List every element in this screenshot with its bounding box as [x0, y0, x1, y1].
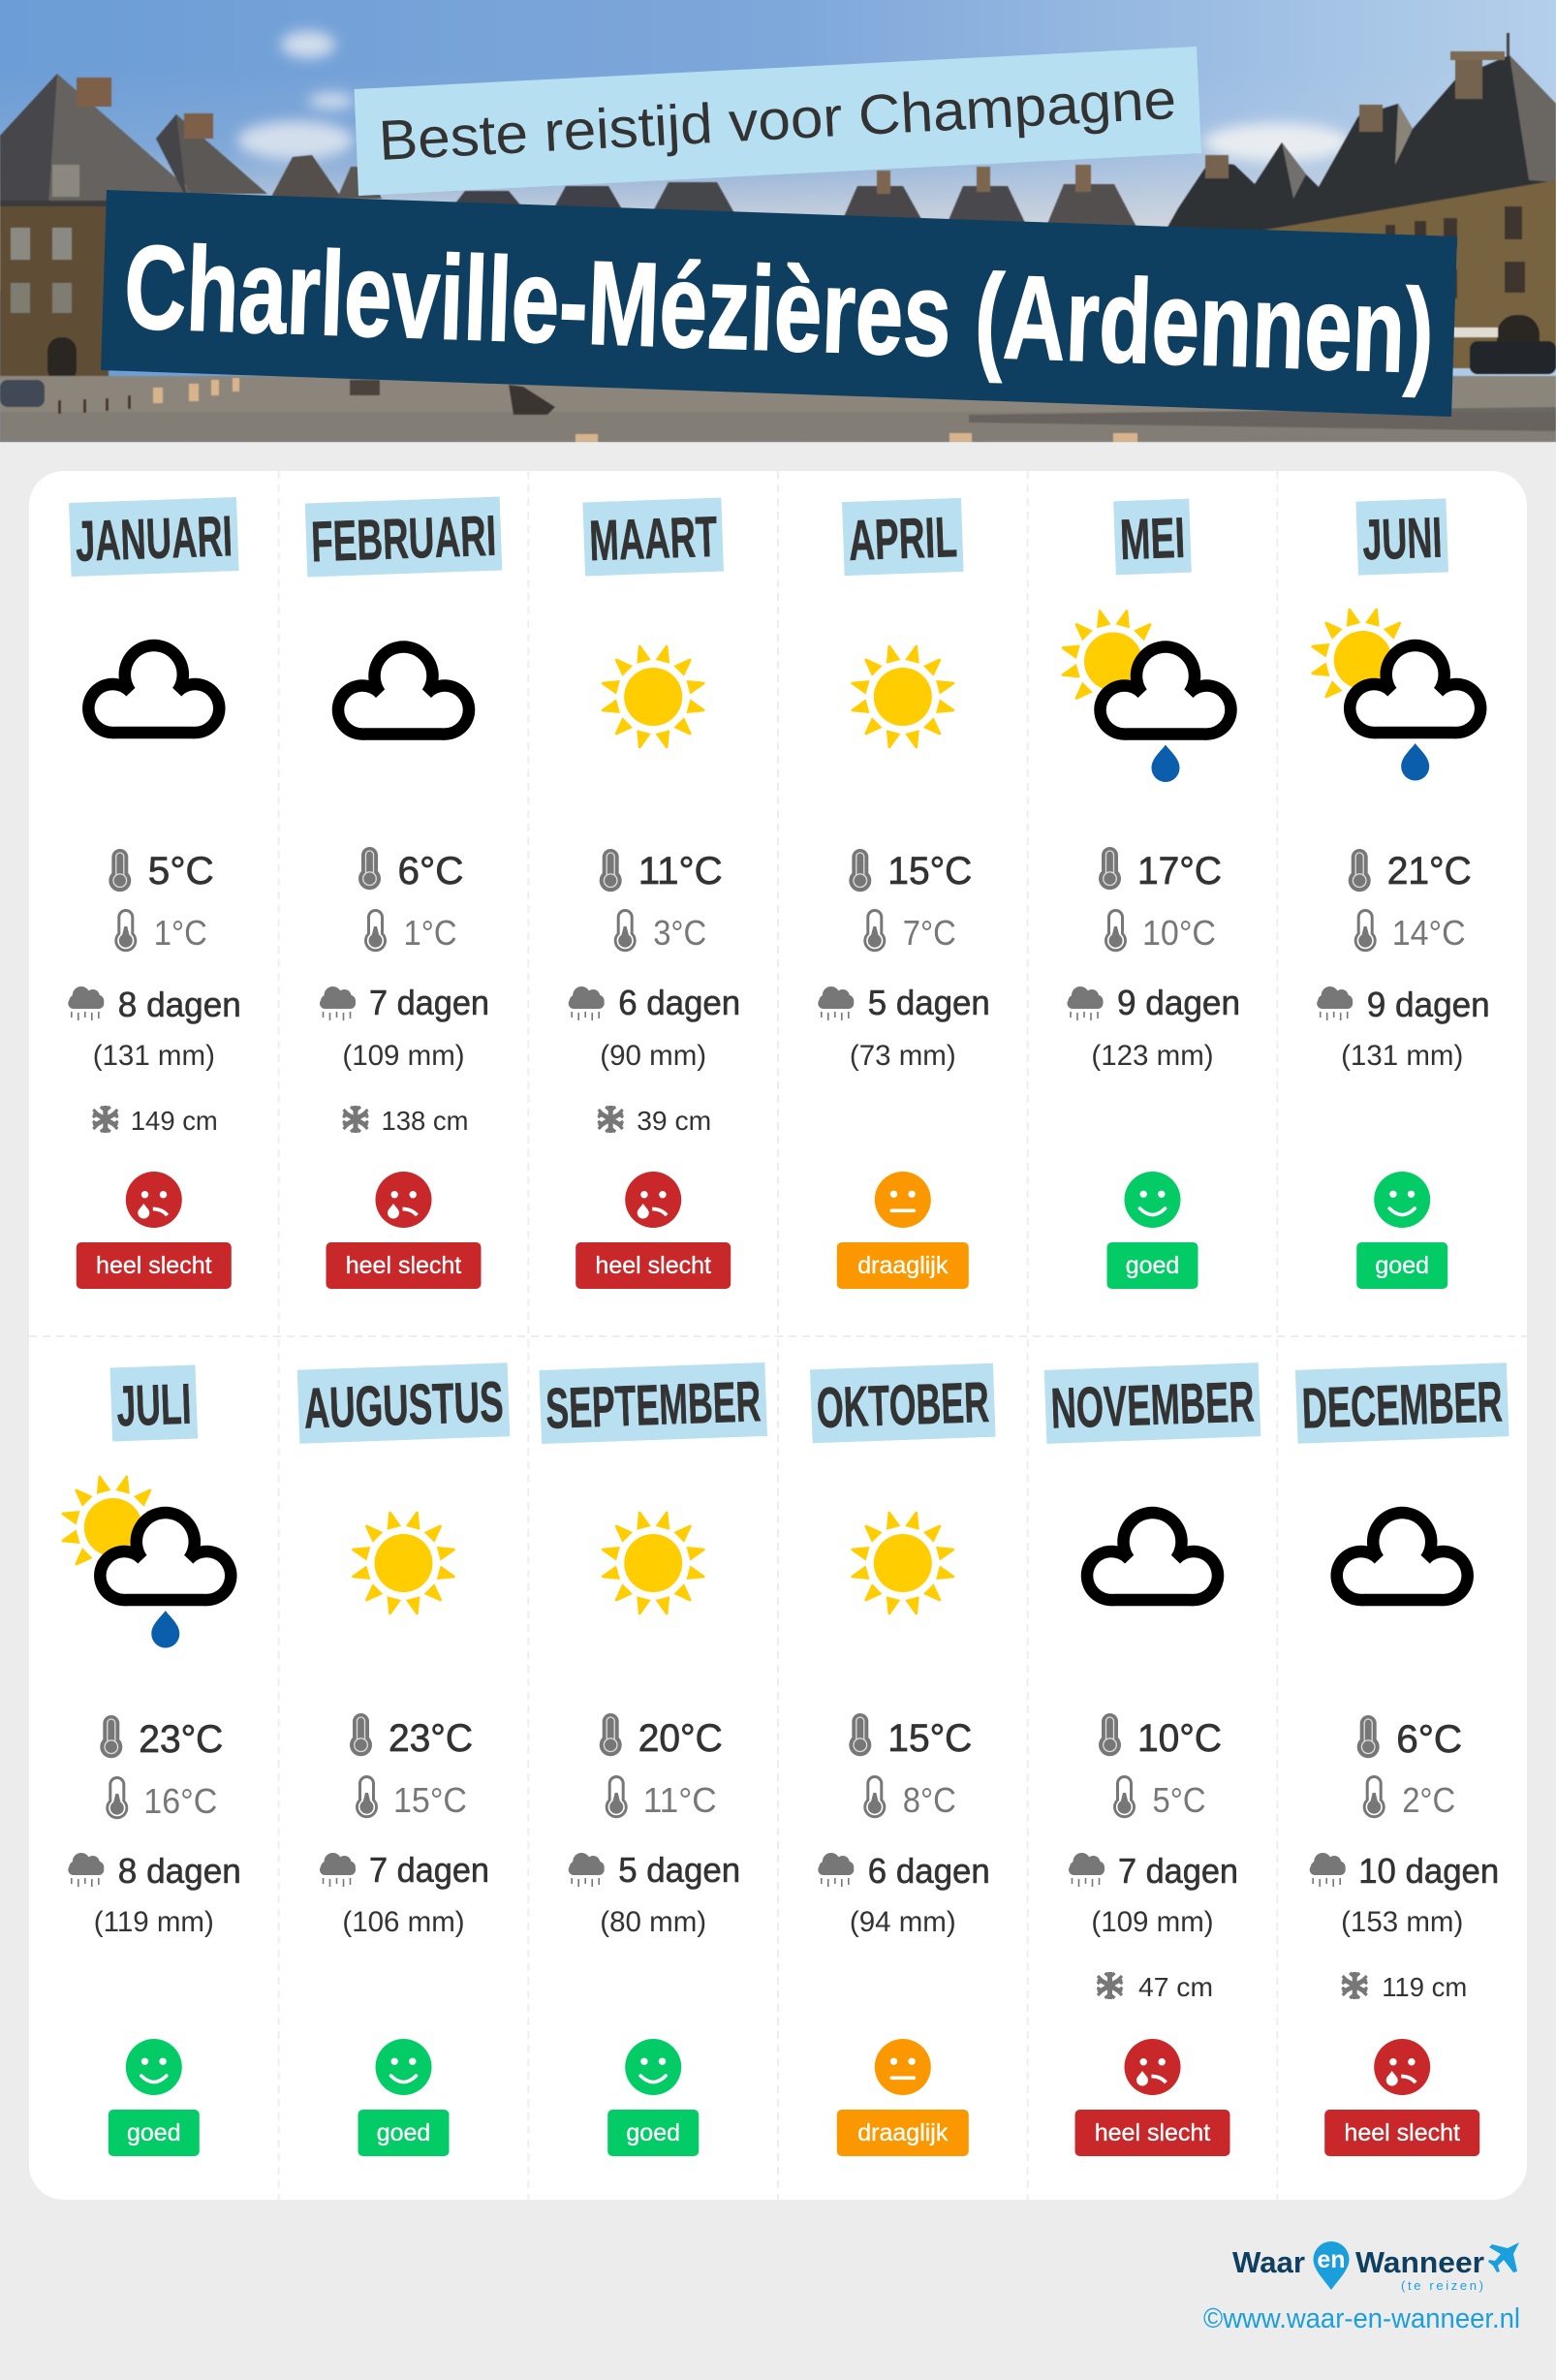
rainfall: (106 mm): [342, 1906, 465, 1938]
icon: airplane: [1488, 2242, 1519, 2272]
month label: APRIL: [848, 505, 958, 573]
snowfall: [93, 1106, 218, 1136]
rating badge: [1075, 2110, 1230, 2156]
snowfall: 138 cm: [382, 1106, 469, 1136]
high temperature: 15°C: [887, 1717, 972, 1760]
low temperature: [114, 909, 207, 953]
high temperature: 6°C: [397, 850, 463, 892]
rainfall: (153 mm): [1341, 1906, 1463, 1938]
low temperature: 2°C: [1402, 1780, 1455, 1820]
high temperature: [849, 1713, 972, 1760]
rainfall: (131 mm): [93, 1040, 215, 1072]
rating badge: [837, 1242, 969, 1289]
rainfall: (109 mm): [1091, 1906, 1214, 1938]
month: september: [539, 1362, 767, 2156]
high temperature: [350, 1713, 473, 1760]
month label: FEBRUARI: [310, 504, 497, 574]
icon: happy face: [1124, 1172, 1180, 1228]
rain days: [569, 1850, 740, 1890]
low temperature: [356, 1775, 467, 1820]
icon: location pin: en: [1317, 2246, 1346, 2273]
month: februari: [305, 497, 502, 1289]
rainfall: (119 mm): [94, 1906, 214, 1938]
high temperature: 6°C: [1396, 1718, 1462, 1761]
month label: [305, 497, 502, 577]
rainfall: (123 mm): [1091, 1040, 1214, 1072]
month label: [1044, 1362, 1260, 1444]
icon: sun, cloud and rain: [60, 1474, 237, 1647]
rainfall: (131 mm): [1341, 1040, 1463, 1072]
icon: happy face: [1374, 1172, 1430, 1228]
rain days: 7 dagen: [369, 1850, 489, 1890]
low temperature: [863, 1775, 956, 1820]
month label: [582, 498, 724, 576]
high temperature: 15°C: [887, 850, 972, 892]
icon: sun: [850, 643, 956, 750]
month label: AUGUSTUS: [302, 1369, 505, 1441]
low temperature: 7°C: [903, 913, 956, 953]
icon: sad face: [625, 1172, 681, 1228]
high temperature: 17°C: [1137, 850, 1222, 892]
month: augustus: [297, 1362, 510, 2156]
high temperature: 5°C: [148, 850, 214, 892]
high temperature: [1357, 1715, 1462, 1761]
snowfall: [598, 1106, 711, 1136]
month: juli: [60, 1364, 241, 2156]
high temperature: [358, 847, 463, 892]
rating badge: heel slecht: [1344, 2119, 1460, 2146]
high temperature: 23°C: [389, 1717, 473, 1760]
high temperature: 10°C: [1137, 1717, 1222, 1760]
rating badge: [109, 2110, 200, 2156]
rain days: 5 dagen: [618, 1850, 740, 1890]
snowfall: 39 cm: [637, 1106, 711, 1136]
month label: [842, 498, 964, 576]
month: juni: [1310, 498, 1490, 1289]
icon: sun: [600, 643, 706, 750]
rating badge: [576, 1242, 731, 1289]
snowfall: 47 cm: [1138, 1972, 1213, 2002]
rating badge: heel slecht: [346, 1252, 461, 1279]
low temperature: 3°C: [653, 913, 706, 953]
rainfall: (80 mm): [600, 1906, 706, 1938]
logo: Waar en Wanneer: [1232, 2241, 1519, 2293]
month: oktober: [810, 1363, 996, 2156]
icon: sun: [350, 1510, 457, 1616]
month: mei: [1060, 499, 1240, 1289]
icon: cloud: [1081, 1507, 1224, 1606]
low temperature: [863, 909, 956, 953]
low temperature: 1°C: [154, 913, 207, 953]
square pavement: [0, 376, 1556, 442]
rain days: 9 dagen: [1117, 983, 1240, 1022]
low temperature: 5°C: [1153, 1780, 1205, 1820]
distant roofs: [270, 155, 342, 199]
low temperature: 14°C: [1392, 913, 1466, 953]
month label: [1355, 498, 1448, 576]
icon: neutral face: [875, 1172, 931, 1228]
icon: cloud: [332, 641, 475, 740]
icon: cloud: [1330, 1507, 1474, 1606]
rating badge: [326, 1242, 481, 1289]
rating badge: heel slecht: [1095, 2119, 1210, 2146]
month label: MAART: [588, 505, 718, 573]
low temperature: 10°C: [1142, 913, 1216, 953]
low temperature: 8°C: [903, 1780, 956, 1820]
icon: happy face: [126, 2039, 182, 2095]
high temperature: [109, 849, 214, 892]
low temperature: [1363, 1775, 1455, 1820]
icon: sad face: [1374, 2039, 1430, 2095]
snowfall: [343, 1106, 469, 1136]
month label: [297, 1362, 510, 1444]
rain days: [1317, 985, 1490, 1024]
low temperature: 11°C: [643, 1780, 717, 1820]
rain days: 9 dagen: [1367, 985, 1490, 1024]
rating badge: goed: [377, 2119, 430, 2146]
icon: sun: [600, 1510, 706, 1616]
month label: JUNI: [1361, 506, 1443, 572]
high temperature: [1099, 847, 1222, 892]
month label: [69, 497, 239, 577]
rating badge: goed: [626, 2119, 680, 2146]
rain days: 10 dagen: [1358, 1851, 1499, 1891]
icon: sun: [850, 1510, 956, 1616]
rating badge: [1324, 2110, 1479, 2156]
icon: location pin: [1314, 2241, 1349, 2290]
month label: MEI: [1119, 506, 1186, 572]
left building wall: [0, 203, 109, 385]
rain days: [320, 983, 489, 1022]
month label: [539, 1362, 767, 1444]
low temperature: [1354, 909, 1466, 953]
month label: [110, 1364, 198, 1442]
low temperature: [614, 909, 706, 953]
low temperature: [106, 1776, 217, 1821]
rating badge: [607, 2110, 699, 2156]
title band: [101, 190, 1457, 417]
left building roofs: [0, 74, 191, 205]
month label: SEPTEMBER: [545, 1369, 762, 1441]
low temperature: 16°C: [143, 1781, 217, 1821]
rainfall: (90 mm): [600, 1040, 706, 1072]
icon: sun, cloud and rain: [1310, 607, 1486, 781]
icon: sad face: [126, 1172, 182, 1228]
icon: cloud: [82, 640, 226, 738]
rating badge: [1106, 1242, 1198, 1289]
rain days: [68, 985, 241, 1024]
rain days: [320, 1850, 489, 1890]
rain days: [818, 1851, 990, 1891]
rating badge: heel slecht: [595, 1252, 711, 1279]
snowfall: 119 cm: [1382, 1972, 1467, 2002]
rainfall: (94 mm): [850, 1906, 956, 1938]
rain days: 5 dagen: [868, 983, 990, 1022]
panel: climate table: [29, 471, 1527, 2200]
logo: Waar en Wanneer: (te reizen): [1401, 2278, 1483, 2293]
rain days: 8 dagen: [118, 985, 241, 1024]
month label: JANUARI: [75, 504, 233, 574]
icon: neutral face: [875, 2039, 931, 2095]
month: april: [818, 498, 990, 1289]
high temperature: 20°C: [638, 1717, 723, 1760]
subtitle band: [355, 47, 1201, 196]
low temperature: [364, 909, 457, 953]
month label: [1113, 499, 1192, 575]
low temperature: 1°C: [403, 913, 457, 953]
rain days: [569, 983, 740, 1022]
snowfall: 149 cm: [131, 1106, 218, 1136]
high temperature: [1099, 1713, 1222, 1760]
rating badge: goed: [1375, 1252, 1429, 1279]
rain days: 7 dagen: [369, 983, 489, 1022]
high temperature: [600, 1713, 723, 1760]
rating badge: [837, 2110, 969, 2156]
month: maart: [569, 498, 740, 1289]
rain days: 7 dagen: [1118, 1851, 1238, 1891]
rain days: 6 dagen: [868, 1851, 990, 1891]
rain days: [818, 983, 990, 1022]
rating badge: [358, 2110, 450, 2156]
website credit: ©www.waar-en-wanneer.nl: [1203, 2303, 1520, 2334]
header photo: Place Ducale: [0, 0, 1556, 442]
month label: [810, 1363, 996, 1443]
high temperature: 23°C: [139, 1718, 223, 1761]
high temperature: [1349, 849, 1472, 892]
high temperature: 21°C: [1387, 850, 1472, 892]
high temperature: 11°C: [638, 850, 723, 892]
rain days: [1069, 1851, 1238, 1891]
logo: Waar en Wanneer: Wanneer: [1355, 2245, 1484, 2279]
rating badge: draaglijk: [857, 2119, 949, 2146]
month: januari: [68, 497, 241, 1289]
rating badge: [77, 1242, 232, 1289]
month: november: [1044, 1362, 1260, 2156]
rating badge: heel slecht: [96, 1252, 212, 1279]
rainfall: (73 mm): [850, 1040, 956, 1072]
month label: NOVEMBER: [1049, 1369, 1256, 1441]
high temperature: [100, 1715, 223, 1761]
right building wall: [1249, 180, 1556, 368]
high temperature: [849, 849, 972, 892]
cars, bollards and figures: [0, 380, 45, 407]
rating badge: draaglijk: [857, 1252, 949, 1279]
month: december: [1295, 1362, 1509, 2156]
rating badge: goed: [1126, 1252, 1179, 1279]
low temperature: [606, 1775, 717, 1820]
rain days: 8 dagen: [118, 1851, 241, 1891]
month label: OKTOBER: [816, 1370, 990, 1440]
rain days: [68, 1851, 241, 1891]
right building roofs: [1165, 55, 1556, 242]
rating badge: goed: [127, 2119, 181, 2146]
subtitle text: Beste reistijd voor Champagne: [377, 68, 1178, 172]
icon: sad face: [376, 1172, 432, 1228]
low temperature: [1113, 1775, 1205, 1820]
snowfall: [1342, 1972, 1467, 2002]
high temperature: [600, 849, 723, 892]
icon: happy face: [376, 2039, 432, 2095]
snowfall: [1097, 1972, 1213, 2002]
icon: happy face: [625, 2039, 681, 2095]
logo: Waar en Wanneer: Waar: [1232, 2245, 1305, 2279]
rain days: [1068, 983, 1240, 1022]
low temperature: 15°C: [393, 1780, 467, 1820]
rainfall: (109 mm): [342, 1040, 465, 1072]
low temperature: [1105, 909, 1216, 953]
rating badge: [1356, 1242, 1447, 1289]
rain days: 6 dagen: [618, 983, 740, 1022]
month label: JULI: [115, 1372, 192, 1438]
icon: sun, cloud and rain: [1060, 608, 1237, 782]
icon: sad face: [1124, 2039, 1180, 2095]
